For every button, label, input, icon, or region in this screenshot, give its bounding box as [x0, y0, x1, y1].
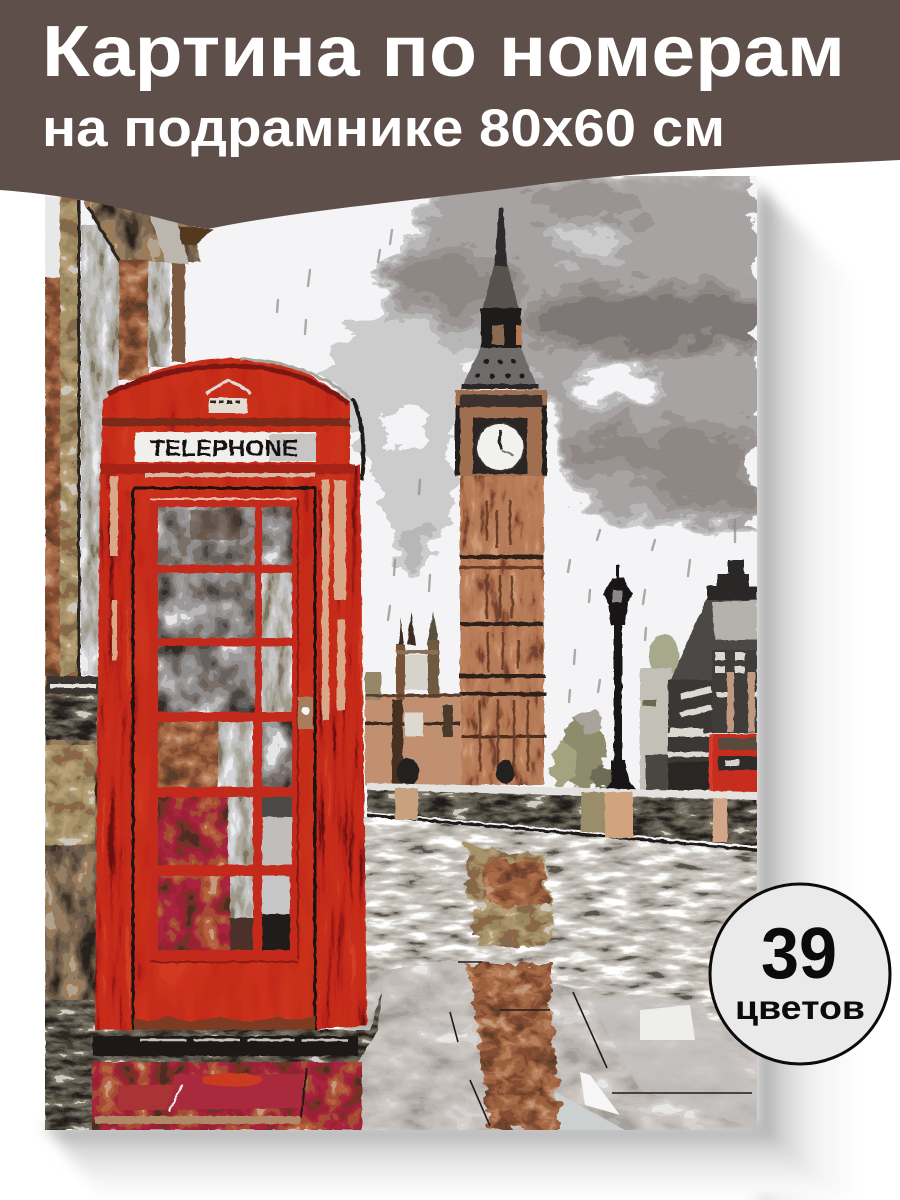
pavement [340, 815, 757, 1130]
left building facade [45, 197, 213, 1034]
brown corner column [45, 270, 61, 700]
Parliament building [365, 612, 514, 786]
pavement joints [450, 962, 752, 1126]
door window panes [158, 507, 292, 950]
rain streaks [277, 230, 735, 702]
box roof and header [100, 358, 350, 490]
belfry [481, 308, 522, 352]
canvas shadow [45, 185, 860, 1200]
embankment wall [367, 783, 757, 850]
peach weathering [110, 476, 346, 720]
box plinth and step [45, 990, 382, 1062]
badge caption: цветов [735, 989, 865, 1026]
puddle reflection of the tower [465, 845, 560, 1130]
upper lintel [85, 197, 200, 262]
ledge [46, 676, 100, 696]
bar under sign [100, 464, 355, 474]
sign: TELEPHONE [135, 432, 316, 462]
badge: 39 colours [710, 884, 890, 1064]
badge number: 39 [761, 914, 837, 994]
recess brown [119, 260, 149, 380]
pale column [81, 225, 119, 675]
lower roof [461, 348, 539, 389]
right-hand buildings [640, 560, 757, 790]
crown emblem [206, 380, 251, 413]
sign: TELEPHONE: TELEPHONE [150, 435, 298, 461]
storm clouds [317, 176, 757, 578]
title: Картина по номерам [42, 12, 845, 92]
door foot shading [134, 1016, 315, 1030]
side lamp bracket [352, 398, 364, 480]
box side panel [315, 465, 367, 1030]
trees behind wall [551, 708, 618, 790]
clock stage [455, 390, 547, 476]
shaft [460, 475, 544, 785]
tower vertical ribs [480, 500, 528, 776]
door [133, 487, 315, 1032]
tower bands [459, 554, 546, 738]
subtitle: на подрамнике 80х60 см [42, 99, 725, 158]
pale window [148, 262, 170, 367]
pediment band [102, 418, 350, 426]
box left frame [95, 470, 134, 1030]
olive column [60, 197, 80, 687]
clock face [476, 423, 524, 471]
lower wall [45, 694, 99, 1034]
small domed building [640, 634, 679, 790]
door handle [298, 697, 313, 729]
top banner [0, 0, 900, 229]
telephone box [95, 358, 367, 1032]
main block with roof [668, 560, 757, 790]
red reflection on the ground [45, 1060, 362, 1130]
spire [481, 208, 520, 314]
painting: London street in the rain [45, 170, 775, 1130]
Big Ben tower [455, 208, 547, 785]
red double-decker bus [709, 734, 757, 797]
street lamp [603, 565, 637, 790]
